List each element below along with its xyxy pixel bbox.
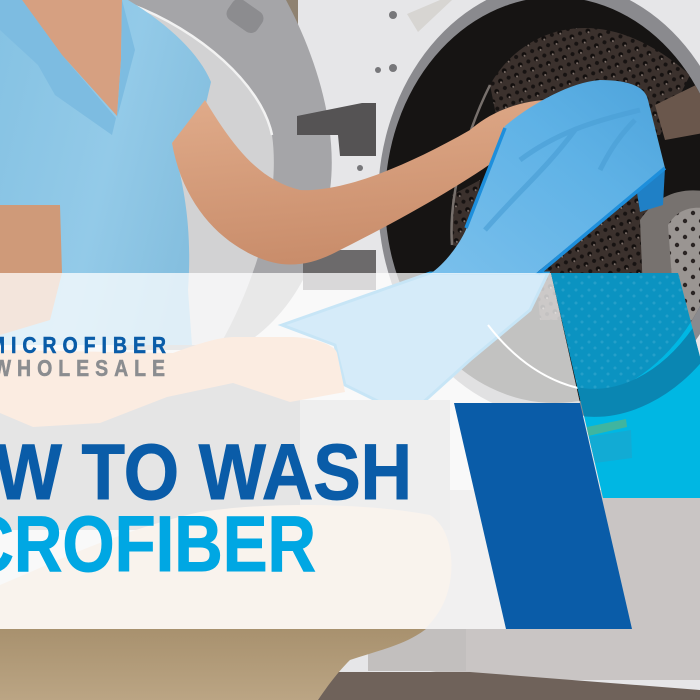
left perforated area xyxy=(452,180,480,250)
towel border xyxy=(466,128,665,274)
door glass xyxy=(120,4,274,345)
white pants xyxy=(0,505,451,629)
hand with towel xyxy=(0,337,345,427)
translucent white band xyxy=(0,273,580,629)
inner drum light arc xyxy=(488,325,578,388)
drum blade xyxy=(655,83,700,140)
label through cyan xyxy=(587,419,627,436)
perforated drum back xyxy=(490,28,690,135)
label text lines xyxy=(588,430,632,463)
towel under folded corner xyxy=(635,168,665,212)
panel: cyan parallelogram xyxy=(551,273,700,498)
lower perforated area xyxy=(538,194,648,320)
title xyxy=(0,428,412,588)
woman shirt xyxy=(0,0,211,345)
wall strip xyxy=(283,0,298,60)
machine kick plate xyxy=(368,629,466,671)
mid machine panel xyxy=(300,400,450,530)
sticker xyxy=(407,0,452,32)
steel drum wall xyxy=(640,190,700,322)
khaki pants xyxy=(0,629,426,700)
drum seen through cyan xyxy=(551,273,691,400)
floor xyxy=(300,672,700,700)
towel xyxy=(430,80,665,274)
towel fold shadows xyxy=(485,110,640,230)
hinge lower xyxy=(303,250,376,290)
panel: dark blue parallelogram xyxy=(454,403,632,629)
steel perforation xyxy=(668,208,700,320)
left upper arm xyxy=(0,205,62,335)
cyan base xyxy=(551,273,700,498)
machine lower panel xyxy=(370,490,700,680)
collar right xyxy=(117,0,135,118)
drum gasket xyxy=(378,0,700,418)
door frame xyxy=(120,0,332,350)
hinge upper xyxy=(297,103,376,156)
chrome rim xyxy=(452,85,490,245)
drum interior xyxy=(370,0,700,410)
towel lower part xyxy=(282,273,548,416)
door glass edge xyxy=(130,4,272,135)
screws xyxy=(357,11,397,171)
arm xyxy=(172,100,560,265)
neck xyxy=(22,0,122,116)
door knob xyxy=(223,0,267,36)
logo: Microfiber Wholesale xyxy=(0,333,172,381)
collar xyxy=(0,0,116,135)
gasket through cyan xyxy=(570,335,700,403)
dark machine shadow xyxy=(0,380,300,530)
